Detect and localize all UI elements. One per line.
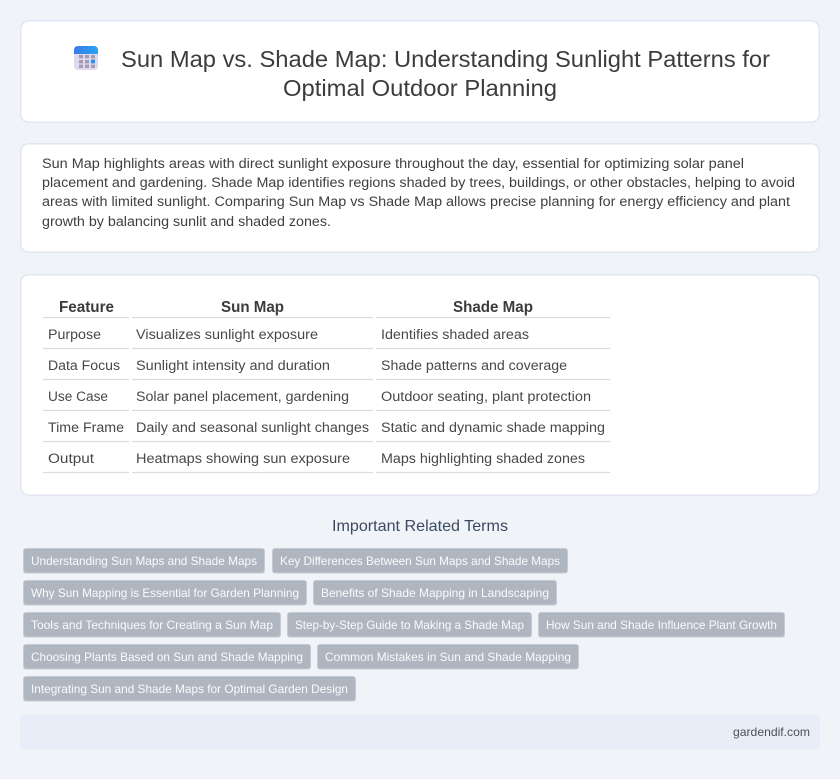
table row: purpose: Identifies shaded areas xyxy=(381,327,529,343)
tag: Step-by-Step Guide to Making a Shade Map xyxy=(295,618,524,632)
title: Optimal Outdoor Planning xyxy=(283,75,557,101)
tag: Common Mistakes in Sun and Shade Mapping xyxy=(325,650,571,664)
table row: time frame: Daily and seasonal sunlight changes xyxy=(136,420,369,436)
text block: description paragraph: areas with limited sunlight. Comparing Sun Map vs Shade Map allows precise planning for energy efficiency and plant xyxy=(42,194,790,210)
panel: comparison table xyxy=(21,275,819,495)
tag xyxy=(538,612,784,637)
table row: data focus: Sunlight intensity and duration xyxy=(136,358,330,374)
title: Sun Map vs. Shade Map: Understanding Sunlight Patterns for xyxy=(121,46,770,72)
footer: gardendif.com xyxy=(733,725,810,739)
panel: title card xyxy=(21,21,819,122)
text block: description paragraph: growth by balancing sunlit and shaded zones. xyxy=(42,214,331,230)
panel: description xyxy=(21,144,819,252)
table row: data focus: Data Focus xyxy=(48,358,120,374)
table row: time frame: Static and dynamic shade mapping xyxy=(381,420,605,436)
tag xyxy=(288,612,532,637)
text block: description paragraph: Sun Map highlights areas with direct sunlight exposure throughout the day, essential for optimizing solar panel xyxy=(42,156,744,172)
tag xyxy=(24,644,310,669)
table row: output: Output xyxy=(48,451,94,467)
tag xyxy=(272,548,568,573)
table row: use case xyxy=(48,389,591,405)
table header: Feature xyxy=(59,299,114,316)
text block: description paragraph: placement and gardening. Shade Map identifies regions shaded by trees, buildings, or other obstacles, helping to avoid xyxy=(42,175,795,191)
table row: purpose: Purpose xyxy=(48,327,101,343)
title xyxy=(121,46,770,101)
tag: Tools and Techniques for Creating a Sun Map xyxy=(31,618,273,632)
tag: Integrating Sun and Shade Maps for Optimal Garden Design xyxy=(31,682,348,696)
table row: time frame xyxy=(48,420,605,436)
table header: Shade Map xyxy=(453,299,533,316)
table row: purpose xyxy=(48,327,529,343)
tag: How Sun and Shade Influence Plant Growth xyxy=(546,618,777,632)
table row: time frame: Time Frame xyxy=(48,420,124,436)
heading: important related terms: Important Related Terms xyxy=(332,518,508,535)
tag: Benefits of Shade Mapping in Landscaping xyxy=(321,586,549,600)
table row: purpose: Visualizes sunlight exposure xyxy=(136,327,318,343)
tag: Understanding Sun Maps and Shade Maps xyxy=(31,554,257,568)
tag xyxy=(318,644,578,669)
icon: calendar xyxy=(74,46,98,70)
table row: output: Maps highlighting shaded zones xyxy=(381,451,585,467)
tag: Key Differences Between Sun Maps and Shade Maps xyxy=(280,554,560,568)
table row: use case: Solar panel placement, gardening xyxy=(136,389,349,405)
footer xyxy=(20,715,820,749)
table row: output xyxy=(48,451,585,467)
tag xyxy=(24,548,264,573)
table header xyxy=(59,299,533,316)
table row: data focus xyxy=(48,358,567,374)
tag xyxy=(314,580,556,605)
table row: use case: Use Case xyxy=(48,389,108,405)
tag xyxy=(24,612,280,637)
tag: Choosing Plants Based on Sun and Shade Mapping xyxy=(31,650,303,664)
tag xyxy=(24,676,356,701)
text block: description paragraph xyxy=(42,156,795,230)
tag xyxy=(24,580,306,605)
tag: Why Sun Mapping is Essential for Garden Planning xyxy=(31,586,299,600)
table header: Sun Map xyxy=(221,299,284,316)
table row: output: Heatmaps showing sun exposure xyxy=(136,451,350,467)
related terms tags xyxy=(24,548,784,701)
table row: data focus: Shade patterns and coverage xyxy=(381,358,567,374)
table row: use case: Outdoor seating, plant protection xyxy=(381,389,591,405)
